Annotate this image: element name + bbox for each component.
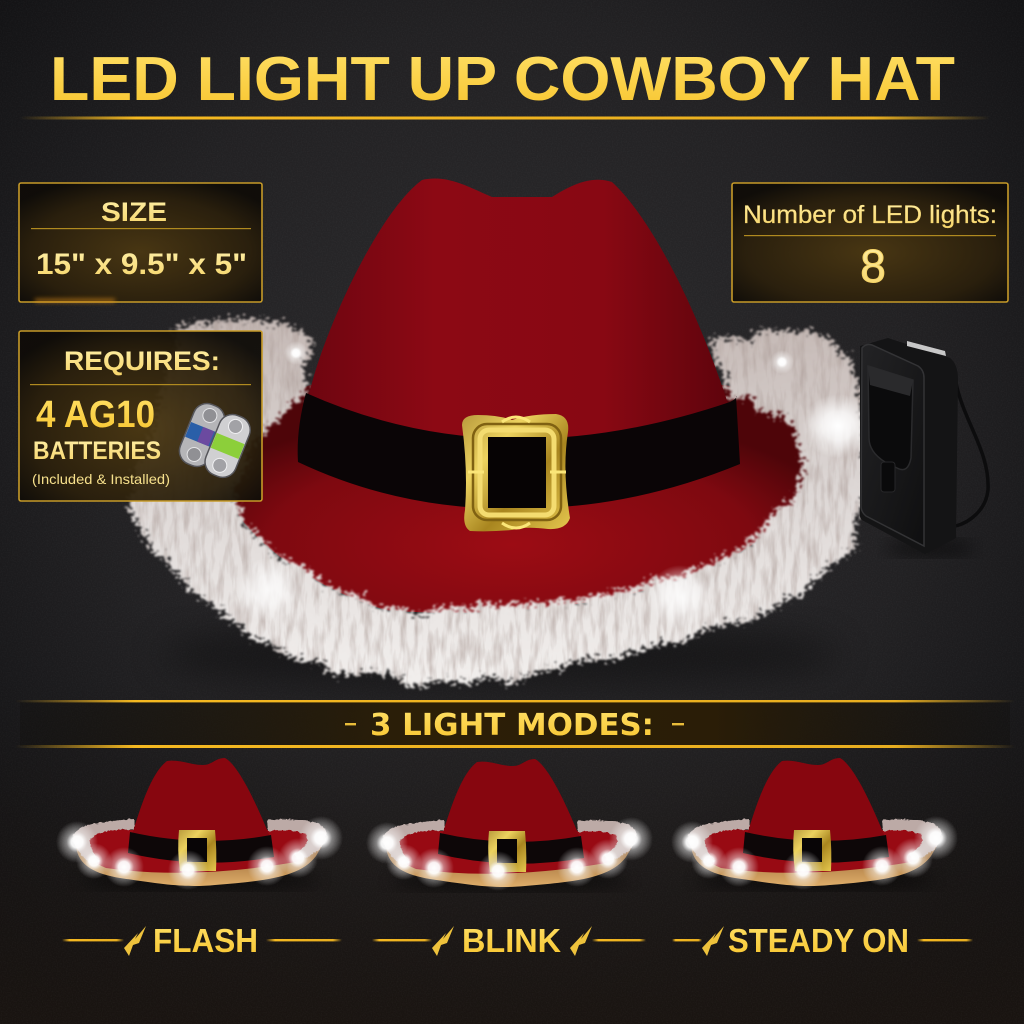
box glint — [35, 299, 115, 302]
requires heading: REQUIRES: — [64, 346, 220, 376]
modes banner — [15, 700, 1015, 748]
led count box — [732, 183, 1008, 302]
right dash — [672, 723, 684, 725]
mode label: steady on — [672, 922, 973, 959]
title: LED LIGHT UP COWBOY HAT — [50, 45, 955, 114]
pack shadow — [886, 539, 974, 557]
pack body — [860, 338, 958, 554]
mode hat: blink — [366, 759, 653, 891]
led heading: Number of LED lights: — [743, 201, 997, 229]
battery pack — [860, 338, 988, 557]
pack wire — [955, 378, 988, 526]
mode label: flash: FLASH — [153, 922, 258, 959]
left dash — [345, 723, 356, 725]
main hat — [125, 179, 874, 690]
led count: 8 — [860, 240, 886, 292]
icon: batteries — [175, 399, 254, 482]
gold buckle — [462, 414, 570, 531]
hat crown — [308, 179, 730, 448]
battery count: 4 AG10 — [36, 394, 155, 436]
hat shadow — [160, 620, 840, 690]
size heading: SIZE — [101, 197, 167, 227]
size value: 15" x 9.5" x 5" — [36, 248, 247, 281]
mode hat: flash — [56, 758, 343, 890]
size box — [19, 183, 262, 302]
white fur trim — [125, 320, 866, 683]
banner fill — [20, 702, 1010, 746]
mode label: steady on: STEADY ON — [728, 922, 909, 959]
mode label: blink: BLINK — [462, 922, 561, 959]
pack front — [861, 344, 924, 546]
banner heading: 3 LIGHT MODES: — [370, 708, 654, 743]
black hat band — [298, 393, 740, 509]
clip tab — [868, 366, 913, 396]
panel: size — [19, 183, 262, 302]
clip stem — [881, 462, 895, 492]
batteries label: BATTERIES — [33, 437, 161, 465]
panel: LED count — [732, 183, 1008, 302]
mode label: flash — [62, 922, 342, 959]
LED glows — [236, 341, 874, 629]
hat brim — [234, 385, 813, 613]
panel: requires — [19, 331, 262, 501]
requires box — [19, 331, 262, 501]
pack switch — [907, 341, 946, 356]
belt clip — [868, 366, 913, 470]
mode hat: steady on — [671, 758, 958, 890]
title underline — [20, 116, 990, 120]
included note: (Included & Installed) — [32, 471, 170, 487]
mode label: blink — [372, 922, 646, 959]
